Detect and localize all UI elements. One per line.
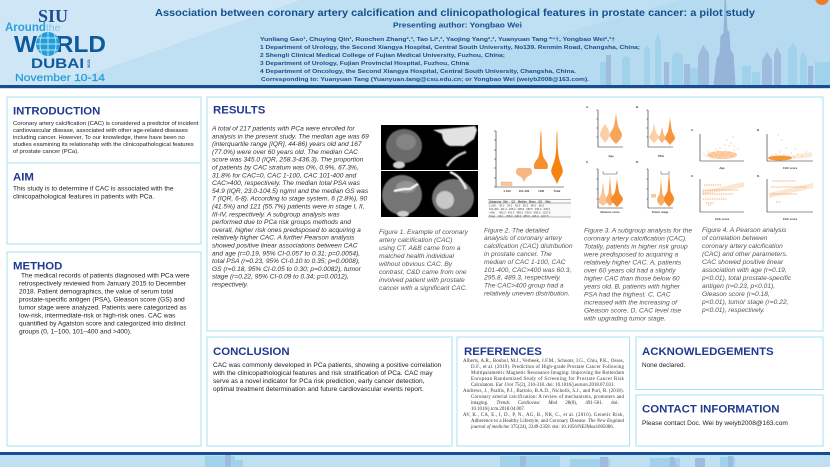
figure 3 caption	[583, 227, 692, 322]
authors and affiliations: 3 Department of Urology, Fujian Provincial Hospital, Fuzhou, China	[260, 61, 470, 67]
method text: prostate-specific antigen (PSA), Gleason score (GS) and	[19, 296, 185, 304]
conclusion text	[212, 362, 442, 393]
figure 4: scatter plots	[691, 128, 813, 221]
method text: The medical records of patients diagnosed with PCa were	[21, 272, 190, 280]
figure 2 caption: calcification (CAC) distribution	[484, 243, 573, 250]
figure 2: data table: Total 34.2 258.3 345.0 385.6 436.3 1227.5	[489, 214, 549, 218]
panel: references	[457, 337, 630, 446]
method text: quantified by Agatston score and categorized into distinct	[19, 320, 186, 328]
aim text	[13, 186, 174, 200]
references text: Coronary arterial calcification: A review of mechanisms, promoters and	[471, 395, 625, 400]
figure 2: data table	[488, 199, 571, 218]
scatter C	[691, 174, 744, 221]
results text: overall, higher risk ones predisposed to acquiring a	[212, 227, 361, 234]
panel: method	[7, 252, 201, 446]
figure 4 caption: p<0.01), tumor stage (r=0.22,	[701, 299, 789, 306]
figure 1 caption: without obvious CAC. By	[379, 261, 453, 268]
figure 2 caption	[483, 227, 573, 298]
references text: Multiparametric Magnetic Resonance Imaging: Improving the Rotterdam	[471, 371, 624, 376]
figure 2 caption: 101-400, CAC>400 was 60.3,	[484, 267, 571, 274]
references text: Calculators. Eur Urol 75(2), 310-318. doi: 10.1016/j.eururo.2018.07.031.	[471, 383, 615, 388]
heading: aim: AIM	[13, 172, 34, 184]
conclusion text: serve as a novel indicator for PCa risk prediction, early cancer detection,	[213, 378, 425, 385]
title: Association between coronary artery calcification and clinicopathological features in prostate cancer: a pilot study	[155, 8, 755, 19]
figure 4 caption: of correlation between	[702, 235, 768, 242]
references text: imaging. Trends Cardiovasc Med 28(8), 491-501. doi:	[471, 401, 619, 406]
method text	[19, 272, 190, 336]
figure 1 caption: artery calcification (CAC)	[379, 237, 452, 244]
figure 2: data table: 1-100 34.2 34.2 60.3 60.3 86.5 86.5	[489, 204, 544, 208]
figure 4 caption: coronary artery calcification	[702, 243, 783, 250]
results text: score was 345.0 (IQR, 258.3-436.3). The proportion	[212, 157, 364, 164]
introduction text: studies examining its relationship with the clinicopathological features	[13, 142, 194, 148]
references text	[463, 359, 625, 430]
figure 3 caption: PSA had the highest. C, CAC	[584, 291, 671, 298]
panel: conclusion	[207, 337, 452, 446]
scatter B: CAC score	[783, 166, 798, 170]
figure 2: data table: Subgroup Min Q1 Median Mean Q3 Max	[489, 199, 551, 203]
panel A: Age	[608, 154, 614, 158]
authors and affiliations	[260, 36, 640, 83]
figure 4 caption: p<0.01), respectively.	[701, 307, 765, 314]
figure 3 caption: Figure 3. A subgroup analysis for the	[584, 227, 692, 234]
results text: CAC>400, respectively. The median total PSA was	[212, 180, 361, 187]
scatter D: D.	[757, 174, 760, 178]
panel B: PSA	[658, 154, 664, 158]
figure 3 caption: coronary artery calcification (CAC).	[584, 235, 687, 242]
scatter A: A.	[691, 128, 694, 132]
panel D: D.	[636, 160, 639, 164]
results text: stage (r=0.22, 95% CI-0.09 to 0.34; p=0.0012),	[212, 274, 349, 281]
figure 1: CT images	[381, 125, 478, 217]
figure 1 caption: Figure 1. Example of coronary	[379, 229, 469, 236]
logo: WORLD: WORLD	[14, 31, 106, 57]
panel: contact information	[636, 395, 823, 446]
logo: DUBAI: DUBAI	[31, 56, 84, 71]
method text: low-risk, intermediate-risk or high-risk ones. CAC was	[19, 312, 176, 320]
scatter A: Age	[719, 166, 725, 170]
introduction text: Coronary artery calcification (CAC) is considered a predictor of incident	[13, 121, 199, 127]
references text: 10.1016/j.tcm.2018.04.007.	[471, 407, 525, 412]
panel A	[586, 105, 623, 158]
figure 2 caption: median of CAC 1-100, CAC	[484, 259, 566, 266]
authors and affiliations: 1 Department of Urology, the Second Xiangya Hospital, Central South University, No139. Renmin Road, Changsha, China;	[260, 45, 640, 51]
figure 2 caption: in prostate cancer. The	[484, 251, 552, 258]
panel D	[636, 160, 674, 214]
footer banner	[0, 452, 830, 467]
figure 2 caption: analysis of coronary artery	[484, 235, 563, 242]
authors and affiliations: 4 Department of Oncology, the Second Xiangya Hospital, Central South University, Changsha, China.	[260, 69, 576, 75]
references text: Andrews, J., Psaltis, P.J., Bartolo, B.A.D., Nicholls, S.J., and Puri, R. (2018).	[463, 389, 624, 394]
header banner	[0, 0, 830, 85]
results text: relatively higher CAC. A further Pearson analysis	[212, 235, 355, 242]
results text: (interquartile range [IQR], 44-86) years old and 167	[212, 141, 362, 148]
panel C: Gleason score	[600, 210, 620, 214]
results text: total PSA (r=0.23, 95% CI-0.10 to 0.35; p=0.0008),	[212, 258, 360, 265]
panel: results	[207, 97, 823, 331]
authors and affiliations: Yunliang Gao¹, Chuying Qin¹, Ruochen Zhang²,³, Tao Li²,³, Yaojing Yang²,³, Yuanyuan Tang *⁴†, Yongbao Wei²,³†	[260, 36, 615, 43]
figure 2: violin plot: 1-100	[503, 189, 511, 193]
panel C: C.	[586, 160, 589, 164]
heading: conclusion: CONCLUSION	[213, 346, 290, 358]
figure 4 caption: association with age (r=0.19,	[702, 267, 787, 274]
heading: contact information: CONTACT INFORMATION	[642, 404, 780, 416]
references text: European Randomized Study of Screening for Prostate Cancer Risk	[471, 377, 625, 382]
contact text: Please contact Doc. Wei by weiyb2008@163.com	[642, 420, 788, 427]
figure 4 caption: CAC showed positive linear	[702, 259, 784, 266]
results text: and age (r=0.19, 95% CI-0.057 to 0.31; p=0.0054),	[212, 250, 360, 257]
figure 1 caption: contrast, C&D came from one	[379, 269, 467, 276]
figure 2: violin plot: Total	[554, 189, 560, 193]
references text: D.F., et al. (2019). Prediction of High-grade Prostate Cancer Following	[471, 365, 625, 370]
results text: III-IV, respectively. A subgroup analysis was	[212, 211, 340, 218]
figure 4 caption: (CAC) and other parameters.	[702, 251, 788, 258]
figure 3: subgroup violin plots	[586, 105, 675, 214]
scatter B: B.	[757, 128, 760, 132]
method text: 2018. Patient demographics, the value of serum total	[19, 288, 174, 296]
method text: retrospectively reviewed from January 2015 to December	[19, 280, 187, 288]
conclusion text: with the clinicopathological features and risk stratification of PCa. CAC may	[212, 370, 433, 377]
figure 3 caption: over 60 years old had a slightly	[584, 267, 676, 274]
introduction text	[13, 121, 199, 155]
orange circle	[815, 0, 829, 5]
method text: tumor stage were analyzed. Patients were categorized as	[19, 304, 187, 312]
logo: SIU: SIU	[38, 6, 68, 26]
figure 4 caption: Gleason score (r=0.18,	[702, 291, 770, 298]
heading: references: REFERENCES	[464, 346, 542, 358]
logo: globe	[36, 32, 60, 56]
figure 1 caption: cancer with a significant CAC.	[379, 285, 467, 292]
aim text: clinicopathological features in patients with PCa.	[13, 194, 154, 200]
results text: analysis in the present study. The median age was 69	[212, 133, 369, 140]
figure 3 caption: Totally, patients in higher risk group	[584, 243, 688, 250]
results text: of patients by CAC stratum was 0%, 0.9%, 67.3%,	[212, 164, 359, 172]
figure 2: violin plot	[494, 131, 564, 193]
panel: introduction and aim	[7, 97, 201, 244]
header rule	[0, 85, 830, 88]
panel B	[636, 105, 675, 158]
introduction text: including cancer. However, To our knowledge, there have been no	[13, 135, 186, 141]
figure 1 caption: using CT. A&B came from a	[379, 245, 461, 252]
panel A: A.	[586, 105, 589, 109]
scatter C: C.	[691, 174, 694, 178]
logo: year: 2021	[86, 58, 91, 68]
authors and affiliations: Corresponding to: Yuanyuan Tang (Yuanyuan.tang@csu.edu.cn; or Yongbao Wei (weiyb2008@163.com).	[261, 77, 589, 83]
figure 2: data table: >400 402.3 441.3 489.3 539.0 568.0 1227.5	[489, 210, 551, 214]
figure 3 caption: relatively higher CAC. A, patients	[584, 259, 682, 266]
figure 2 caption: 295.8, 489.3, respectively.	[483, 275, 561, 282]
panel C	[586, 160, 623, 214]
scatter C: CAC score	[715, 217, 730, 221]
figure 1 caption: involved patient with prostate	[379, 277, 465, 284]
figure 2: violin plot: 101-400	[519, 189, 530, 193]
figure 4 caption: antigen (r=0.23, p<0.01),	[702, 283, 775, 290]
heading: acknowledgements: ACKNOWLEDGEMENTS	[642, 346, 774, 358]
results text: performed due to PCa risk groups methods and	[211, 219, 351, 226]
figure 1 caption: matched health individual	[379, 253, 454, 260]
results text: (41.5%) and 121 (55.7%) patients were in stage I, II,	[212, 204, 365, 210]
figure 2 caption: The CAC>400 group had a	[484, 283, 564, 290]
conclusion text: CAC was commonly developed in PCa patients, showing a positive correlation	[213, 362, 442, 369]
figure 3 caption: Gleason score. D, CAC level rise	[584, 307, 681, 314]
results text: 31.8% for CAC=0, CAC 1-100, CAC 101-400 and	[212, 172, 357, 179]
introduction text: of prostate cancer (PCa).	[13, 149, 79, 155]
scatter A	[691, 128, 744, 170]
scatter D	[757, 174, 813, 221]
scatter B	[757, 128, 813, 170]
results text: respectively.	[212, 282, 248, 288]
figure 4 caption	[701, 227, 792, 314]
figure 3 caption: years old. B, patients with higher	[583, 283, 681, 290]
authors and affiliations: 2 Shengli Clinical Medical College of Fujian Medical University, Fuzhou, China;	[260, 53, 505, 59]
panel: acknowledgements	[636, 337, 823, 390]
skyline	[600, 0, 830, 85]
figure 4 caption: p<0.01), total prostate-specific	[701, 275, 792, 282]
figure 2 caption: Figure 2. The detailed	[484, 227, 549, 234]
heading: introduction: INTRODUCTION	[13, 106, 100, 118]
figure 2 caption: relatively uneven distribution.	[484, 290, 570, 298]
presenting author: Presenting author: Yongbao Wei	[393, 20, 522, 30]
results text: (77.0%) were over 60 years old. The median CAC	[212, 149, 358, 156]
results text: GS (r=0.18, 95% CI-0.05 to 0.30; p=0.0082), tumor	[212, 266, 362, 273]
figure 3 caption: higher CAC than those below 60	[584, 275, 680, 282]
results text: showed positive linear associations between CAC	[212, 242, 358, 250]
figure 2: data table: 101-400 111.3 235.2 295.8 283.5 336.4 400.0	[489, 207, 551, 211]
method text: groups (0, 1–100, 101–400 and >400).	[19, 328, 132, 336]
aim text: This study is to determine if CAC is associated with the	[13, 186, 174, 192]
conclusion text: optimal treatment determination and future cardiovascular events report.	[213, 386, 424, 393]
scatter D: CAC score	[783, 217, 798, 221]
results text	[211, 126, 369, 288]
references text: journal of medicine 375(24), 2349-2358. doi: 10.1056/NEJMoa1605086.	[470, 425, 614, 430]
results text: 7 (IQR, 6-8). According to stage system, 6 (2.8%), 90	[212, 196, 367, 203]
heading: results: RESULTS	[213, 104, 266, 116]
figure 2: violin plot: >400	[538, 189, 545, 193]
logo: date: November 10-14	[15, 72, 105, 84]
figure 3 caption: with upgrading tumor stage.	[584, 315, 666, 322]
references text: Adherence to a Healthy Lifestyle, and Coronary Disease. The New England	[471, 419, 625, 424]
introduction text: cardiovascular disease, associated with other age-related diseases	[13, 128, 188, 134]
results text: 54.9 (IQR, 23.0-104.5) ng/ml and the median GS was	[212, 188, 369, 195]
acknowledgements text: None declared.	[642, 362, 686, 369]
references text: AV, K., CA, E., I, D., P, N., AG, B., NR, C., et al. (2016). Genetic Risk,	[463, 413, 624, 418]
panel B: B.	[636, 105, 639, 109]
logo: Around the: Aroundthe	[5, 22, 61, 34]
figure 3 caption: were predisposed to acquiring a	[584, 251, 678, 258]
figure 1 caption	[379, 229, 469, 292]
panel D: Tumor stage	[652, 210, 669, 214]
logo	[5, 6, 106, 84]
results text: A total of 217 patients with PCa were enrolled for	[211, 126, 356, 132]
figure 3 caption: increased with the increasing of	[584, 299, 678, 306]
references text: Alberts, A.R., Roobol, M.J., Verbeek, J.F.M., Schoots, I.G., Chiu, P.K., Osses,	[463, 359, 624, 364]
figure 4 caption: Figure 4. A Pearson analysis	[702, 227, 787, 234]
heading: method: METHOD	[13, 260, 62, 272]
